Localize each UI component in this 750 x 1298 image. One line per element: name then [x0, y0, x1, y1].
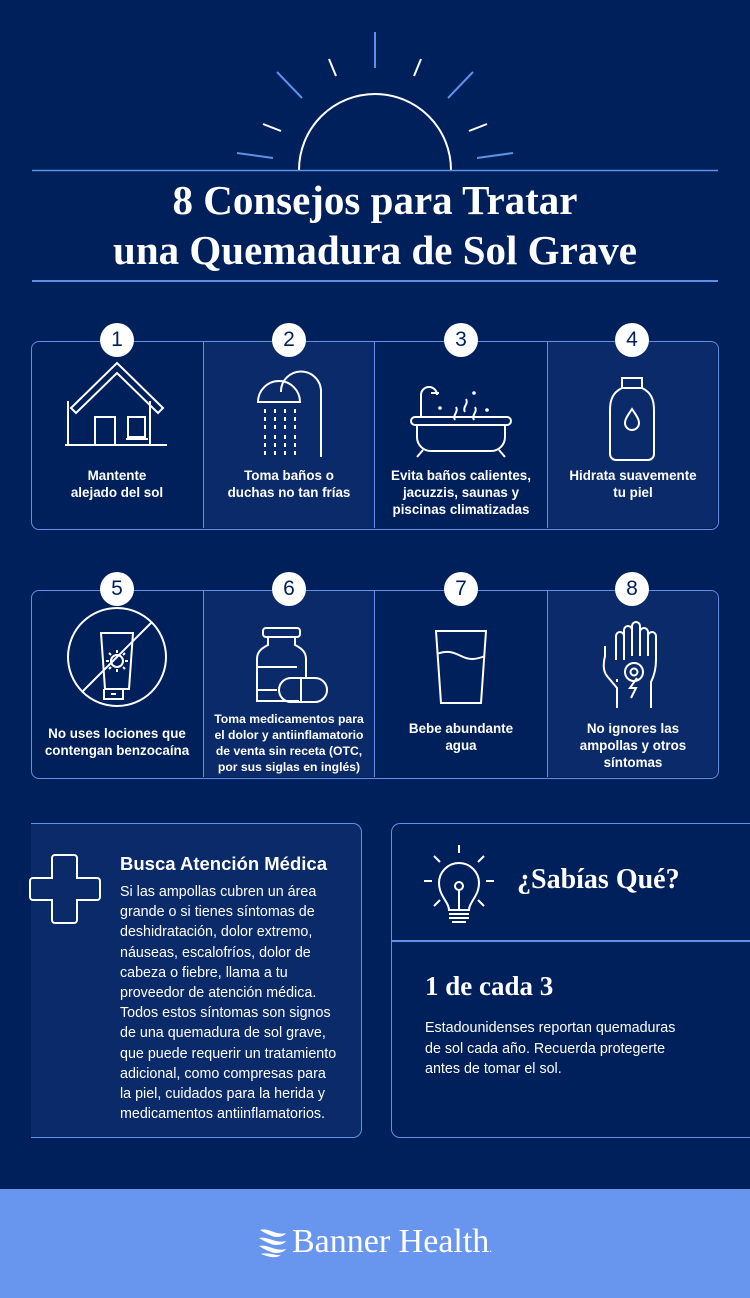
tip 7 [409, 572, 513, 753]
text block: la piel, cuidados para la herida y [120, 1086, 325, 1102]
text block: náuseas, escalofríos, dolor de [120, 945, 311, 961]
stat: 1 de cada 3 [425, 971, 553, 1001]
footer [0, 1189, 750, 1298]
title [113, 177, 637, 273]
tip 7: agua [445, 738, 477, 753]
text block: de sol cada año. Recuerda protegerte [425, 1040, 665, 1056]
tip 8: 8 [626, 577, 638, 600]
title: una Quemadura de Sol Grave [113, 227, 637, 273]
tip 6: Toma medicamentos para [214, 712, 364, 726]
tip 5: 5 [111, 577, 123, 600]
panel: busca atención médica [31, 823, 362, 1138]
tip 1 [65, 323, 167, 500]
text block [120, 884, 336, 1122]
tip 3: 3 [455, 328, 467, 351]
tip 4: tu piel [613, 485, 653, 500]
text block: Estadounidenses reportan quemaduras [425, 1020, 675, 1036]
text block: proveedor de atención médica. [120, 985, 316, 1001]
text block: adicional, como compresas para [120, 1066, 326, 1082]
text block: medicamentos antiinflamatorios. [120, 1106, 325, 1122]
tip 6 [214, 572, 364, 774]
logo: Banner Health. [292, 1223, 492, 1260]
text block: cabeza o fiebre, llama a tu [120, 965, 288, 981]
tip 7: Bebe abundante [409, 721, 513, 736]
tip 5: contengan benzocaína [45, 743, 189, 758]
tip 3: jacuzzis, saunas y [403, 485, 519, 500]
tip 2: 2 [283, 328, 295, 351]
heading: Busca Atención Médica [120, 853, 327, 874]
tip 8 [580, 572, 686, 770]
tip 2 [228, 323, 350, 500]
tip 6: 6 [283, 577, 295, 600]
tip 4: Hidrata suavemente [569, 468, 697, 483]
tip 8: síntomas [604, 755, 662, 770]
panel: tips row 2 [31, 590, 719, 779]
tip 6: por sus siglas en inglés) [218, 760, 360, 774]
panel: tips row 1 [31, 341, 719, 530]
text block: de una quemadura de sol grave, [120, 1025, 326, 1041]
icon: sun [32, 32, 718, 172]
tip 6: el dolor y antiinflamatorio [214, 728, 363, 742]
title: 8 Consejos para Tratar [172, 177, 578, 223]
icon: cross [29, 854, 101, 924]
tip 6: de venta sin receta (OTC, [216, 744, 362, 758]
tip 1: 1 [111, 328, 123, 351]
text block: deshidratación, dolor extremo, [120, 924, 312, 940]
tip 3: Evita baños calientes, [391, 468, 531, 483]
tip 1: alejado del sol [71, 485, 163, 500]
tip 7: 7 [455, 577, 467, 600]
tip 5 [45, 572, 190, 758]
icon: lightbulb [424, 845, 494, 923]
tip 3: piscinas climatizadas [393, 502, 529, 517]
tip 4 [569, 323, 697, 500]
tip 2: duchas no tan frías [228, 485, 350, 500]
tip 4: 4 [626, 328, 638, 351]
tip 8: ampollas y otros [580, 738, 686, 753]
tip 1: Mantente [88, 468, 146, 483]
tip 8: No ignores las [587, 721, 679, 736]
text block [425, 1020, 675, 1077]
text block: Todos estos síntomas son signos [120, 1005, 331, 1021]
tip 3 [391, 323, 531, 517]
text block: que puede requerir un tratamiento [120, 1046, 336, 1062]
panel: sabías qué [391, 823, 750, 1138]
text block: Si las ampollas cubren un área [120, 884, 316, 900]
text block: grande o si tienes síntomas de [120, 904, 315, 920]
text block: antes de tomar el sol. [425, 1061, 562, 1077]
heading: sabías qué: ¿Sabías Qué? [517, 864, 680, 895]
tip 5: No uses lociones que [48, 726, 186, 741]
tip 2: Toma baños o [244, 468, 334, 483]
